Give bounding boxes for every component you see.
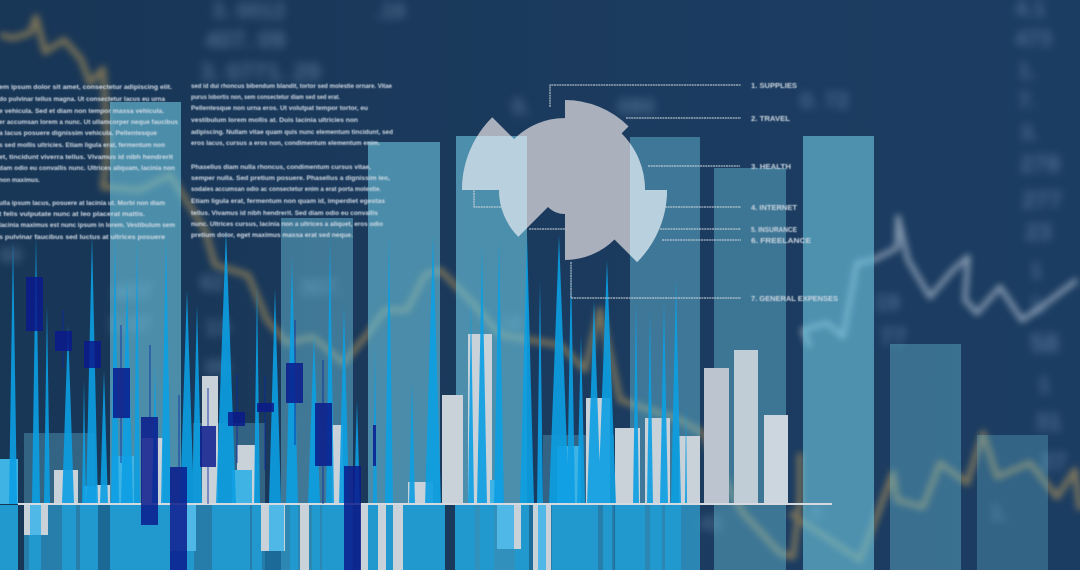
blurred background numbers: 277 (1022, 187, 1062, 214)
text block: right column (191, 83, 393, 239)
text block: left column: ulla ipsum lacus, posuere at lacinia ut. Morbi non diam (0, 200, 166, 207)
blurred background numbers: 278 (1020, 151, 1060, 178)
blurred background numbers: 1. (1018, 58, 1036, 83)
blurred background numbers: 09 (205, 355, 229, 380)
text block: left column: lacinia maximus est nunc ipsum in lorem. Vestibulum sem (0, 222, 176, 229)
blurred background numbers: 18 (500, 313, 522, 335)
candlestick chart (26, 277, 376, 570)
legend labels: 2. TRAVEL (751, 116, 791, 123)
blurred background numbers: 307. (300, 275, 343, 300)
blurred background numbers: 65 (0, 245, 22, 267)
radial pie chart (462, 100, 667, 262)
blurred background numbers: 3. 0771. 29 (200, 59, 320, 86)
blue spike chart (9, 230, 687, 504)
lower band wash (24, 505, 700, 570)
legend labels (751, 83, 838, 303)
text block: left column: s sed mollis ultricies. Etiam ligula erat, fermentum non (0, 142, 165, 149)
legend labels: 4. INTERNET (751, 205, 798, 212)
blurred background numbers: 473 (1015, 26, 1052, 51)
blurred background numbers: 1. (990, 500, 1008, 525)
text block: left column: er accumsan lorem a nunc. Ut ullamcorper neque faucibus (0, 119, 179, 126)
text block: right column: vestibulum lorem mollis at. Duis lacinia ultricies non (191, 117, 358, 124)
blurred background numbers: 080 (618, 94, 655, 119)
blurred background numbers: 13 (205, 315, 229, 340)
blurred background numbers: 19 (875, 290, 899, 315)
blurred background numbers: 7. (1018, 88, 1036, 113)
pie sectors lit by bars (462, 136, 667, 262)
blurred background numbers: 62 (200, 270, 224, 295)
tall translucent bars (24, 102, 1048, 570)
text block: right column: eros lacus, cursus a eros non, condimentum elementum enim. (191, 140, 380, 147)
text block: left column: e vehicula. Sed et diam non tempor massa vehicula. (0, 108, 164, 115)
text block: right column: tellus. Vivamus id nibh hendrerit. Sed diam odio eu convallis (191, 210, 379, 217)
text block: left column: a lacus posuere dignissim vehicula. Pellentesque (0, 130, 158, 137)
white price line (803, 217, 1077, 347)
blurred background numbers: 9 (810, 503, 821, 525)
blurred background numbers: 0. 72 (800, 88, 849, 113)
candlestick wicks (63, 310, 323, 570)
blurred background numbers: 1 (1030, 258, 1042, 283)
text block: right column: Etiam ligula erat, fermentum non quam id, imperdiet egestas (191, 198, 386, 205)
legend labels: 1. SUPPLIES (751, 83, 797, 90)
blurred background numbers: 3. (1020, 120, 1038, 145)
text block: right column: Pellentesque non urna eros. Ut volutpat tempor tortor, eu (191, 105, 368, 112)
blurred background numbers: 3.07 (108, 312, 151, 337)
text block: left column: t felis vulputate nunc at leo placerat mattis. (0, 211, 145, 218)
blurred background numbers: 1. (1030, 292, 1048, 317)
legend labels: 7. GENERAL EXPENSES (751, 296, 838, 303)
lower band white bars (24, 505, 551, 570)
text block: right column: Phasellus diam nulla rhoncus, condimentum cursus vitae, (191, 164, 371, 171)
blurred background numbers: 31 (1035, 409, 1062, 436)
blurred background numbers: 0. (512, 94, 530, 119)
blurred background numbers: 58 (1030, 328, 1059, 358)
blurred background numbers: 407. 09 (205, 27, 285, 54)
blurred background numbers: 23 (1025, 219, 1052, 246)
text block: right column: sodales accumsan odio ac consectetur enim a erat porta molestie. (191, 186, 381, 193)
text block: right column: nunc. Ultrices cursus, lacinia non a ultrices a aliquet, eros odio (191, 221, 383, 228)
bright blue bars (0, 446, 581, 504)
blurred background numbers: 27 (1040, 449, 1067, 476)
text block: right column: pretium dolor, eget maximus massa erat sed neque. (191, 232, 353, 239)
blurred background numbers: 1 (1038, 372, 1050, 397)
white bar chart (54, 334, 788, 504)
blurred background numbers: 42 (700, 513, 722, 535)
text block: left column: dam odio eu convallis nunc. Ultrices aliquam, lacinia non (0, 165, 175, 172)
text block: right column: purus lobortis non, sem consectetur diam sed sed erat. (191, 94, 340, 101)
lower mirrored band (0, 505, 700, 570)
text block: left column: em ipsum dolor sit amet, consectetur adipiscing elit. (0, 84, 172, 91)
legend leader lines (474, 85, 741, 298)
baseline (18, 503, 832, 505)
legend labels: 5. INSURANCE (751, 227, 797, 234)
text block: left column (0, 84, 179, 241)
pie sectors (462, 100, 667, 262)
legend labels: 6. FREELANCE (751, 238, 811, 245)
lower band blue columns (0, 505, 681, 570)
lower band light overlays (30, 505, 546, 570)
text block: left column: s pulvinar faucibus sed luctus at ultrices posuere (0, 234, 166, 241)
text block: left column: non maximus. (0, 177, 40, 184)
text block: right column: adipiscing. Nullam vitae quam quis nunc elementum tincidunt, sed (191, 129, 393, 136)
text block: left column: do pulvinar tellus magna. Ut consectetur lacus eu urna (0, 96, 166, 103)
text block: right column: semper nulla. Sed pretium posuere. Phasellus a dignissim leo, (191, 175, 390, 182)
text block: left column: et, tincidunt viverra tellus. Vivamus id nibh hendrerit (0, 154, 173, 161)
blurred background numbers: 407 (112, 279, 152, 306)
text block: right column: sed id dui rhoncus bibendum blandit, tortor sed molestie ornare. Vitae (191, 83, 393, 90)
legend labels: 3. HEALTH (751, 164, 791, 171)
blurred background numbers: 77 (880, 324, 907, 351)
